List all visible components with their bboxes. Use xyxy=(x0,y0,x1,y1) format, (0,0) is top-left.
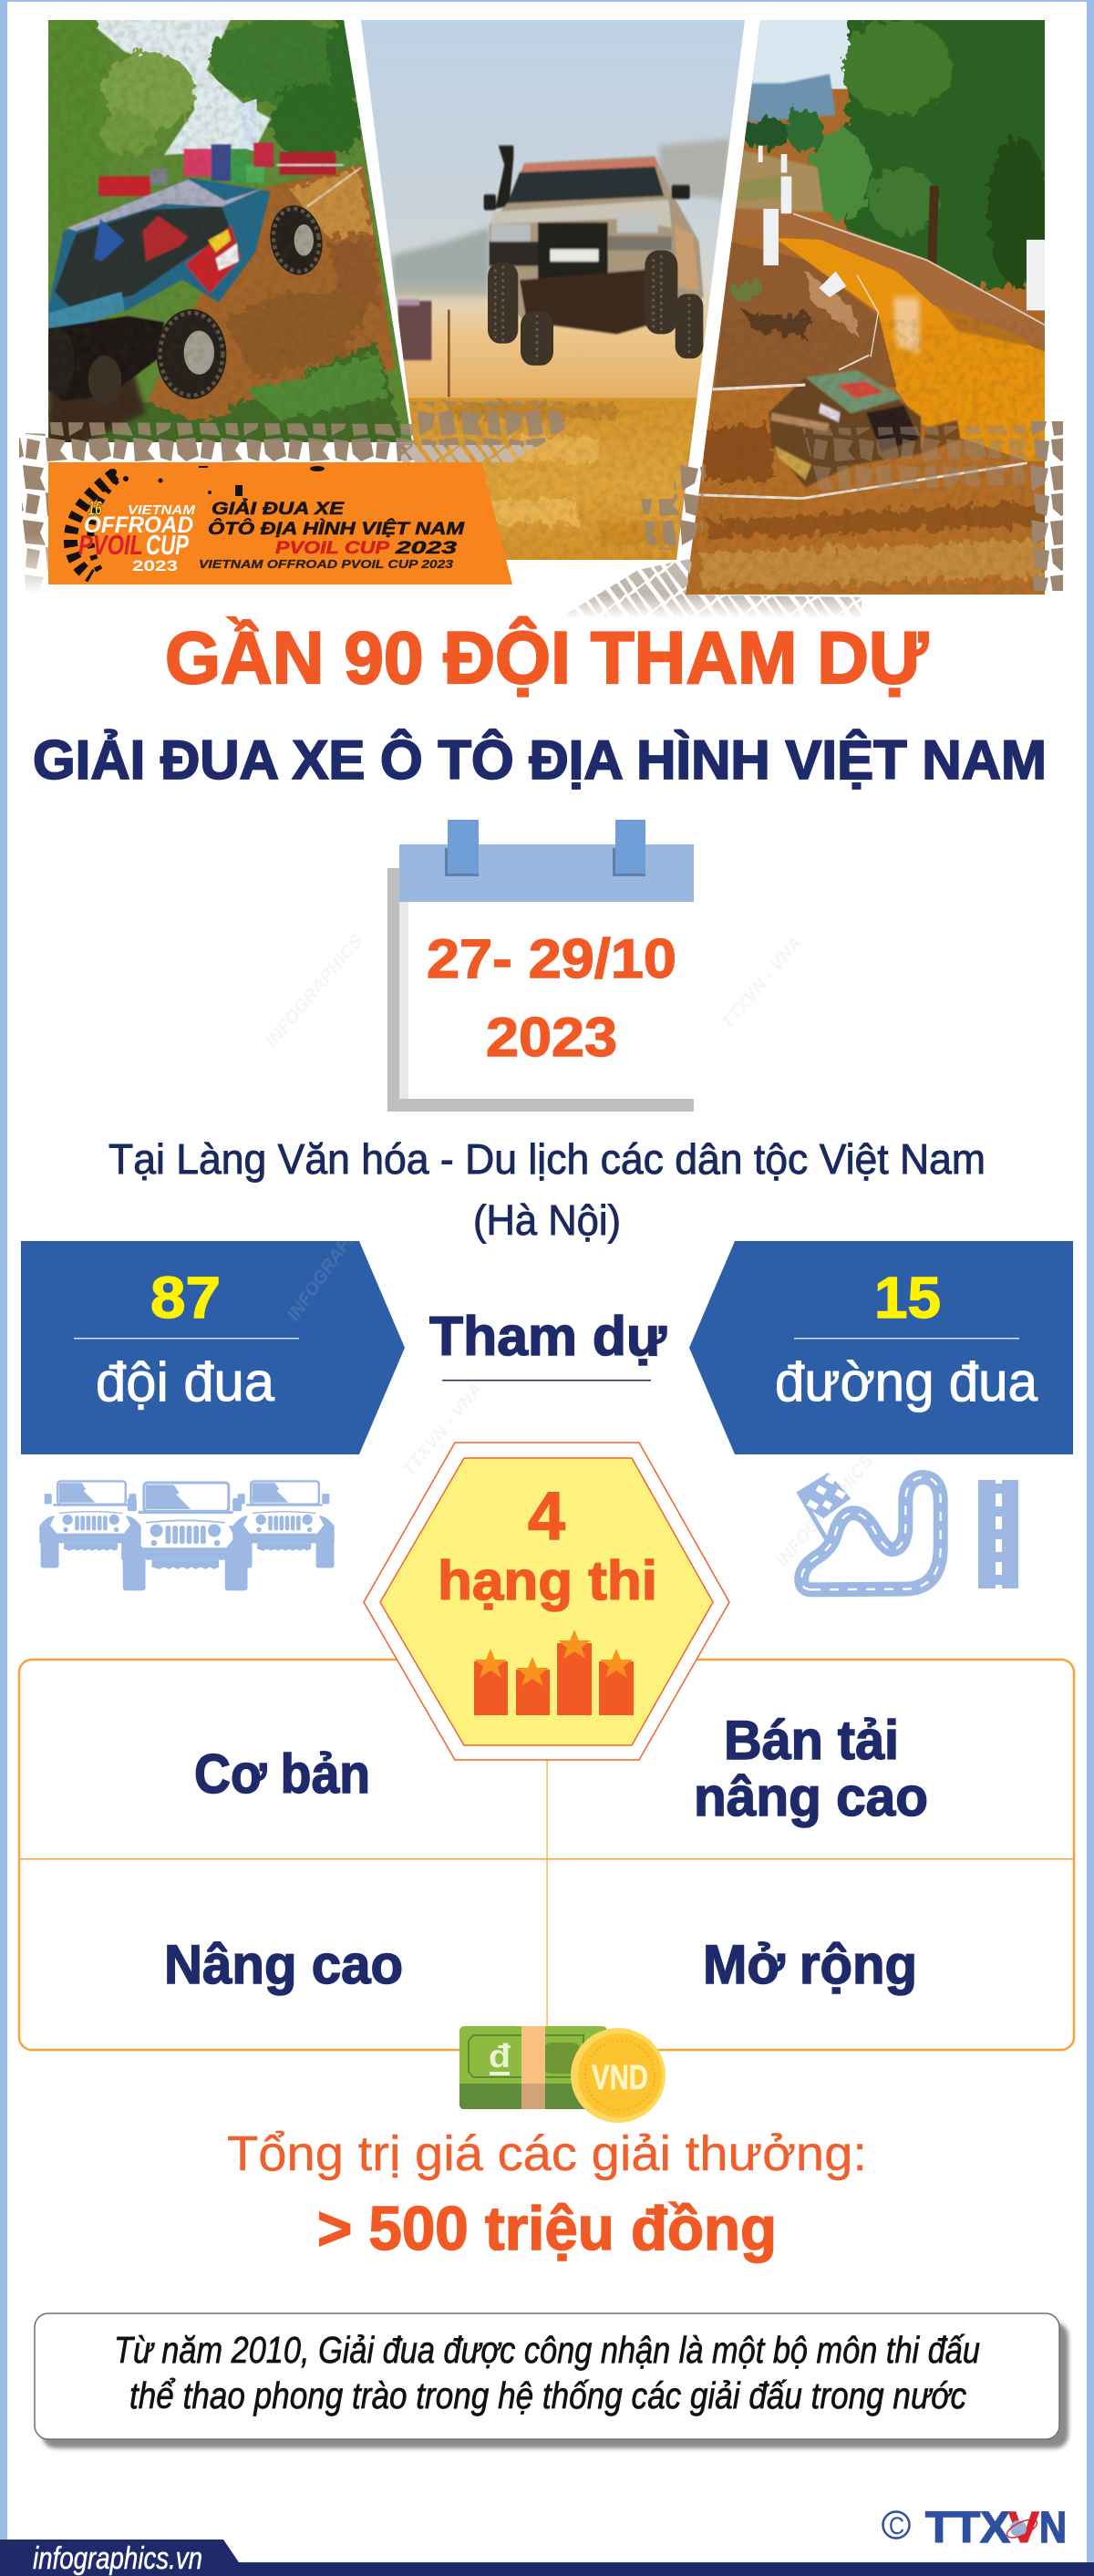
category: basic: Cơ bản xyxy=(194,1743,370,1805)
logo mark: CUP xyxy=(146,529,189,561)
logo: TTXVN xyxy=(882,2504,1067,2552)
title: navy headline: GIẢI ĐUA XE Ô TÔ ĐỊA HÌNH VIỆT NAM xyxy=(33,729,1047,791)
icon: podium bars with stars xyxy=(474,1629,634,1715)
logo title xyxy=(199,499,465,571)
panel: teams: INFOGRAPHICS xyxy=(284,1198,380,1325)
logo title: VIETNAM OFFROAD PVOIL CUP 2023 xyxy=(199,557,454,571)
logo: TTXVN: V xyxy=(1008,2504,1039,2552)
note text xyxy=(114,2329,980,2416)
watermarks: INFOGRAPHICS xyxy=(772,1451,878,1571)
logo title: PVOIL CUP xyxy=(275,539,389,558)
number: 15: 15 xyxy=(874,1265,941,1330)
category: advanced pickup xyxy=(694,1710,928,1827)
prize label: Tổng trị giá các giải thưởng: xyxy=(227,2126,867,2181)
icon: banknotes and VND coin: VND xyxy=(592,2059,648,2097)
icon: race track with flag xyxy=(796,1473,941,1589)
category: advanced: Nâng cao xyxy=(164,1934,403,1995)
label: teams: đội đua xyxy=(96,1351,275,1412)
photo: buggy climbing a hill xyxy=(48,20,412,442)
icon: banknotes and VND coin xyxy=(459,2026,666,2123)
icon: three jeeps xyxy=(39,1481,335,1590)
label: categories: hạng thi xyxy=(438,1550,657,1611)
watermarks xyxy=(262,931,878,1571)
logo mark: 16 xyxy=(88,497,102,520)
footer bar xyxy=(0,2540,1094,2576)
year: 2023 xyxy=(486,1007,617,1068)
logo mark xyxy=(70,466,325,576)
logo title: 2023 xyxy=(394,539,458,558)
category: advanced pickup: Bán tải xyxy=(724,1710,899,1771)
event logo banner xyxy=(48,462,512,585)
note text: thể thao phong trào trong hệ thống các giải đấu trong nước xyxy=(129,2374,966,2416)
logo title: GIẢI ĐUA XE xyxy=(212,499,346,519)
category: extended: Mở rộng xyxy=(703,1934,917,1995)
footer site name: infographics.vn xyxy=(33,2541,202,2576)
hexagon badge: 4 categories xyxy=(364,1443,729,1760)
logo title: ÔTÔ ĐỊA HÌNH VIỆT NAM xyxy=(208,519,465,539)
panel: teams xyxy=(21,1198,405,1454)
logo mark: PVOIL xyxy=(78,529,143,561)
location text xyxy=(108,1135,986,1244)
note box xyxy=(35,2313,1068,2448)
watermarks: INFOGRAPHICS xyxy=(262,931,367,1051)
logo: TTXVN: TTX xyxy=(925,2504,1010,2552)
logo: TTXVN: C xyxy=(889,2512,904,2540)
panel: tracks xyxy=(689,1241,1073,1454)
logo mark: VIETNAM xyxy=(128,502,196,518)
watermarks: TTXVN - VNA xyxy=(398,1380,488,1480)
number: 4: 4 xyxy=(528,1478,565,1554)
location text: Tại Làng Văn hóa - Du lịch các dân tộc Việt Nam xyxy=(108,1135,986,1183)
watermarks: TTXVN - VNA xyxy=(717,933,807,1033)
photo: muddy track xyxy=(684,4,1060,602)
number: 87: 87 xyxy=(150,1265,221,1330)
label: tracks: đường đua xyxy=(775,1351,1038,1412)
date: 27- 29/10 xyxy=(427,928,676,989)
title: orange headline: GẦN 90 ĐỘI THAM DỰ xyxy=(165,616,929,699)
logo mark: 2023 xyxy=(132,557,178,574)
logo: TTXVN: N xyxy=(1039,2504,1067,2552)
prize value: > 500 triệu đồng xyxy=(317,2194,777,2263)
heading: participants: Tham dự xyxy=(429,1306,667,1367)
logo mark: OFFROAD xyxy=(84,512,193,538)
icon: calendar with date xyxy=(387,820,694,1112)
tyre tracks xyxy=(18,402,1063,618)
category: advanced pickup: nâng cao xyxy=(694,1766,928,1827)
panel: categories table xyxy=(19,1660,1074,2050)
icon: straight road xyxy=(978,1480,1018,1588)
icon: banknotes and VND coin: đ xyxy=(489,2037,511,2074)
location text: (Hà Nội) xyxy=(473,1196,621,1244)
photo: pickup truck jumping xyxy=(356,18,757,569)
